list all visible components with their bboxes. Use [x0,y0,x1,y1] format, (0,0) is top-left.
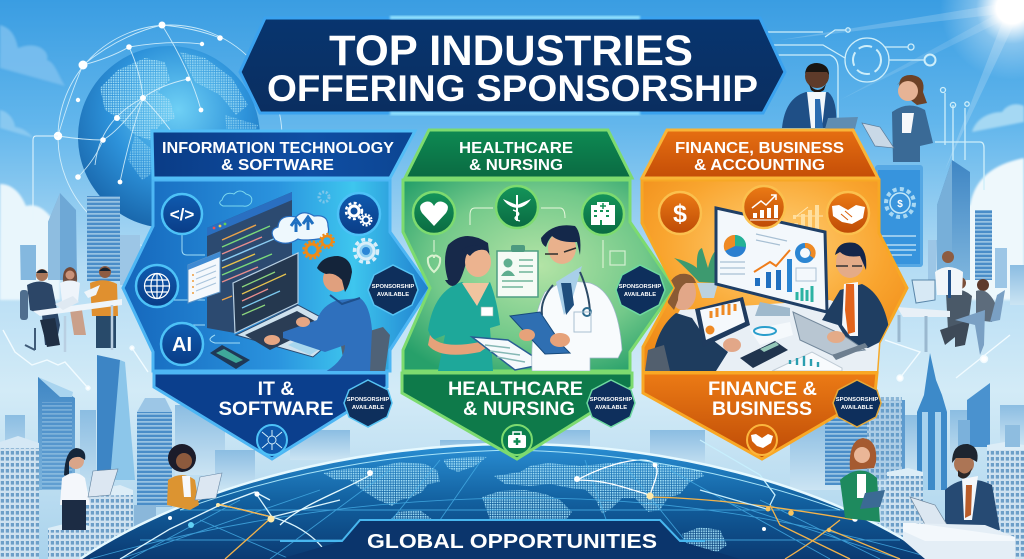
title text: TOP INDUSTRIES [329,27,693,75]
panel: information technology [123,131,430,459]
right foreground buildings [825,353,1024,559]
badge: sponsorship available footer: SPONSORSHIP [590,397,632,403]
finance illustration: analysts and dashboard [645,205,890,371]
badge: sponsorship available: AVAILABLE [624,292,656,298]
footer band: IT & Software: IT & [258,378,294,400]
icon: heart [413,192,455,234]
icon: AI: AI [172,334,192,356]
healthcare illustration: nurse and doctor [428,208,625,371]
badge: sponsorship available footer: SPONSORSHIP [836,397,878,403]
distant city skyline [5,240,1024,500]
panel: finance [642,130,907,459]
background group: left meeting table [20,266,122,352]
background man top right [782,63,858,129]
panel header: IT: INFORMATION TECHNOLOGY [162,140,395,157]
panel header: healthcare: HEALTHCARE [459,140,573,157]
badge: sponsorship available [616,265,665,315]
panel header: finance [642,130,878,178]
footer band: finance: FINANCE & [708,378,817,400]
icon: network hub [257,425,287,455]
footer banner: global opportunities [280,520,740,559]
badge: sponsorship available footer: AVAILABLE [595,405,627,411]
footer text: GLOBAL OPPORTUNITIES [367,531,657,553]
background man at laptop right [903,444,1015,559]
badge: sponsorship available footer: AVAILABLE [841,405,873,411]
right mid city buildings [928,160,1007,288]
globe with network [33,22,282,249]
network lines over city [3,330,1010,390]
icon: caduceus [496,186,538,228]
footer band: finance: BUSINESS [712,398,812,420]
left mid city buildings [21,193,140,285]
background woman with laptop left [60,448,118,530]
icon: growth chart [743,186,785,228]
icon: AI [161,323,203,365]
IT illustration: coder at desk [172,191,390,372]
icon: handshake footer [747,425,777,455]
badge: sponsorship available: SPONSORSHIP [372,284,414,290]
icon: code [162,194,202,234]
icon: hospital [582,193,624,235]
clouds [0,25,1024,300]
holographic gear screen: $ [897,199,903,210]
footer band: healthcare [402,373,635,459]
badge: sponsorship available footer: AVAILABLE [352,405,384,411]
holographic gear screen [875,165,923,267]
footer band: finance [643,373,881,459]
panel header: healthcare: & NURSING [469,157,563,174]
icon: handshake [827,192,869,234]
panel header: finance: FINANCE, BUSINESS [675,140,844,157]
footer band: healthcare: & NURSING [463,398,575,420]
footer band: IT & Software [154,373,392,459]
badge: sponsorship available: SPONSORSHIP [619,284,661,290]
panel header: IT [152,131,415,178]
icon: globe [136,265,178,307]
panel header: finance: & ACCOUNTING [694,157,825,174]
badge: sponsorship available footer [344,380,392,427]
background people at desk right [897,251,1005,355]
badge: sponsorship available footer [587,380,635,427]
badge: sponsorship available: AVAILABLE [377,292,409,298]
badge: sponsorship available footer [833,380,881,427]
icon: first aid [502,425,532,455]
circuit decoration top right [700,28,984,190]
title banner [240,16,785,115]
earth horizon with world map [80,440,935,559]
badge: sponsorship available [368,265,418,315]
badge: sponsorship available footer: SPONSORSHIP [347,397,389,403]
footer band: IT & Software: SOFTWARE [218,398,334,420]
icon: code: </> [170,205,194,224]
panel header: healthcare [405,130,632,178]
background woman top right [862,75,933,162]
title text: OFFERING SPONSORSHIP [267,68,758,109]
icon: dollar: $ [673,200,687,228]
left foreground buildings [0,355,172,559]
background woman with tablet right [840,438,885,522]
panel header: IT: & SOFTWARE [221,157,334,174]
panel: healthcare [402,130,675,459]
sun glow [780,0,1024,170]
footer band: healthcare: HEALTHCARE [448,378,583,400]
icon: dollar [659,192,701,234]
icon: gears [338,193,380,235]
background woman with laptop centre left [167,444,222,510]
